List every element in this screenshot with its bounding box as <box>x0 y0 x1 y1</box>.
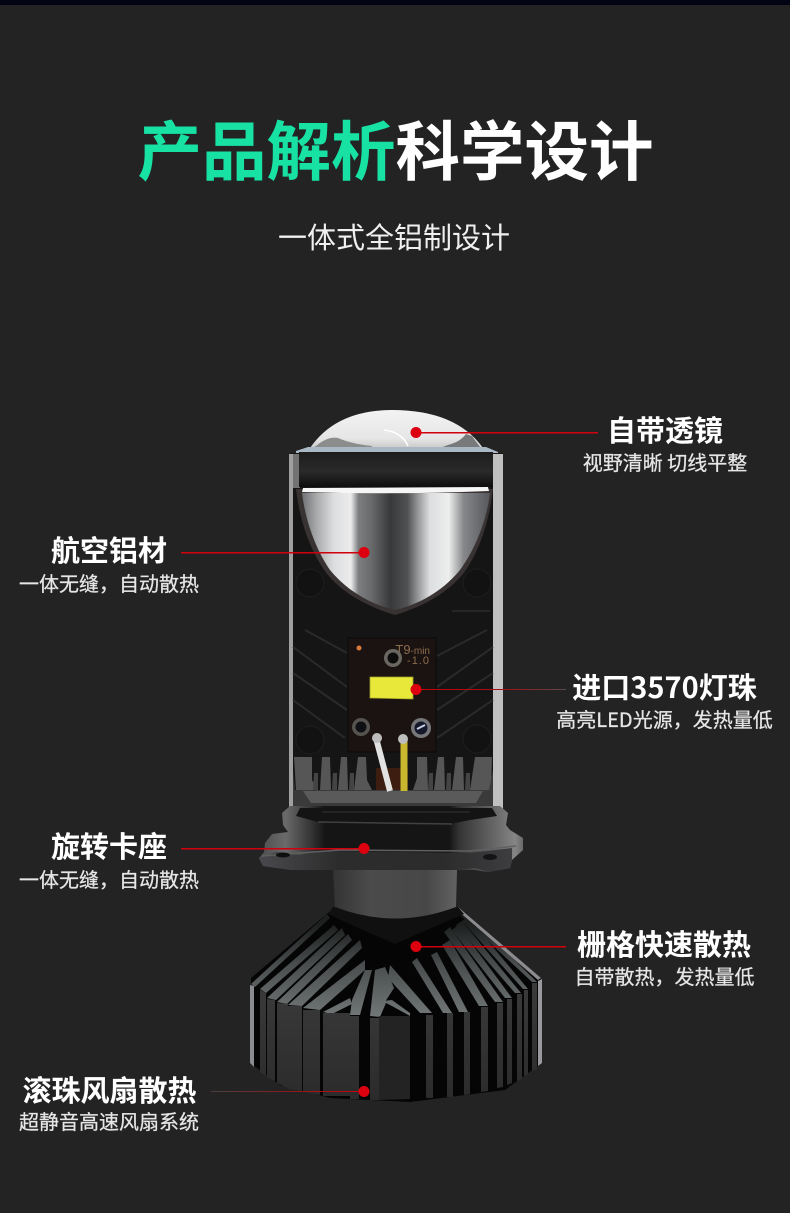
label: 栅格快速散热 <box>574 922 754 990</box>
lens dome <box>310 410 483 448</box>
diagonal fin tops <box>251 907 541 1017</box>
board version text: -1.0 <box>407 655 430 667</box>
right mounting ear <box>483 854 497 860</box>
label: 旋转卡座: 旋转卡座 <box>51 824 167 866</box>
label: 滚珠风扇散热: 超静音高速风扇系统 <box>19 1106 199 1135</box>
label: 栅格快速散热: 栅格快速散热 <box>577 922 751 964</box>
label: 滚珠风扇散热: 滚珠风扇散热 <box>22 1068 197 1110</box>
neck <box>333 870 457 918</box>
left side strip <box>289 454 293 812</box>
flange highlight line <box>262 846 516 856</box>
label: 滚珠风扇散热 <box>19 1068 199 1135</box>
reflector surround <box>296 489 493 615</box>
yellow LED chip <box>370 677 413 699</box>
top dark strip <box>0 0 790 5</box>
housing round recesses <box>296 569 491 754</box>
mounting collar and flange <box>259 806 523 872</box>
product: H4 LED lens headlight bulb <box>250 410 542 1102</box>
body housing <box>290 453 503 815</box>
right side strip <box>493 454 503 812</box>
radiator tray <box>293 770 493 806</box>
left mounting ear <box>276 852 290 858</box>
heat sink base <box>250 907 542 1102</box>
callout: 滚珠风扇散热 leader line <box>211 1086 370 1097</box>
collar ridge highlight <box>318 822 452 824</box>
label: 旋转卡座: 一体无缝，自动散热 <box>19 864 199 893</box>
white wire <box>376 738 390 791</box>
label: 航空铝材: 一体无缝，自动散热 <box>19 568 199 597</box>
callout: 航空铝材 leader line <box>181 547 370 558</box>
heat sink <box>250 907 542 1102</box>
upper side shading <box>293 454 300 488</box>
collar top edge <box>296 808 497 824</box>
callout: 栅格快速散热 leader line <box>410 941 566 952</box>
collar silhouette <box>259 806 523 872</box>
label: 航空铝材: 航空铝材 <box>51 528 167 570</box>
indicator dot <box>356 646 362 650</box>
label: 自带透镜 <box>583 408 747 476</box>
vertical fin faces <box>250 979 542 1100</box>
left screw <box>352 718 370 736</box>
LED circuit board <box>348 638 436 752</box>
reflector shield <box>302 493 490 610</box>
top screw <box>384 649 402 667</box>
internal red board <box>376 768 408 790</box>
lens rim <box>296 447 498 455</box>
label: 进口3570灯珠 <box>556 665 773 733</box>
right screw <box>411 718 431 738</box>
title: 产品解析科学设计 <box>137 100 654 194</box>
label: 航空铝材 <box>19 528 199 597</box>
label: 进口3570灯珠: 高亮LED光源，发热量低 <box>556 704 773 733</box>
yellow wire <box>400 740 408 791</box>
housing ribs <box>293 611 493 738</box>
tray face <box>303 791 483 803</box>
callout: 自带透镜 leader line <box>410 427 598 438</box>
lower flange bar <box>259 848 512 872</box>
label: 旋转卡座 <box>19 824 199 893</box>
label: 自带透镜: 视野清晰 切线平整 <box>583 447 747 476</box>
label: 进口3570灯珠: 进口3570灯珠 <box>572 665 757 707</box>
reflector top white edge <box>302 487 489 493</box>
black lens ring <box>299 452 493 487</box>
label: 栅格快速散热: 自带散热，发热量低 <box>574 961 754 990</box>
callout: 旋转卡座 leader line <box>181 843 370 854</box>
callout: 进口3570灯珠 leader line <box>410 684 566 695</box>
subtitle: 一体式全铝制设计 <box>278 215 510 257</box>
solder points <box>372 733 408 744</box>
radiator teeth <box>294 757 492 790</box>
heat sink shoulder <box>328 907 464 944</box>
central groove <box>322 811 470 813</box>
board model text: T9-min <box>395 642 430 657</box>
small radiator teeth <box>313 773 470 790</box>
label: 自带透镜: 自带透镜 <box>607 408 723 450</box>
